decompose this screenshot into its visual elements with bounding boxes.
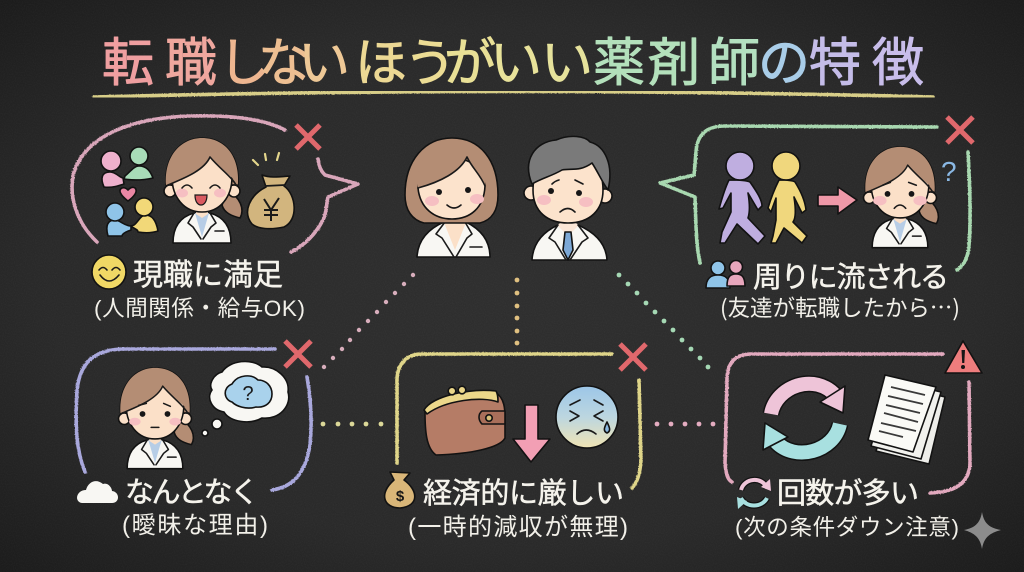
dotted connector: top left	[322, 273, 415, 369]
dotted connector: top right	[617, 273, 710, 369]
title: 徴	[872, 35, 924, 93]
icon: happy colleagues	[101, 147, 158, 236]
icon: cycle arrows	[763, 384, 845, 452]
panel: too many job changes	[725, 341, 982, 540]
icon: thought cloud	[202, 361, 289, 436]
female pharmacist	[405, 138, 498, 257]
title: い	[541, 35, 593, 93]
heading: 周りに流される	[753, 261, 949, 294]
bubble outline	[76, 349, 311, 490]
title: な	[258, 35, 310, 93]
pharmacist uneasy	[119, 368, 193, 469]
male pharmacist	[524, 136, 612, 260]
cross mark	[285, 341, 311, 367]
panel: vague reason	[76, 341, 311, 539]
title: 転	[102, 35, 154, 93]
subheading: (人間関係・給与OK)	[94, 296, 305, 321]
panel: satisfied with current job	[72, 116, 358, 321]
icon: walking friends	[719, 152, 807, 244]
icon: wallet	[424, 386, 505, 455]
dotted connector: center	[515, 278, 519, 345]
subheading: (曖昧な理由)	[122, 512, 268, 539]
central pharmacists	[405, 136, 612, 260]
question mark: ?	[941, 156, 957, 187]
title: 薬	[593, 35, 645, 93]
subheading: (次の条件ダウン注意)	[735, 515, 959, 540]
title: い	[490, 35, 542, 93]
heading: $	[396, 488, 405, 505]
panel: swept along by others	[660, 117, 973, 323]
subheading: (一時的減収が無理)	[408, 514, 628, 541]
heading: 経済的に厳しい	[423, 477, 624, 510]
pharmacist confused	[864, 147, 938, 248]
bubble outline	[397, 354, 641, 488]
title: 特	[809, 35, 861, 93]
title: ほ	[355, 35, 407, 93]
cross mark	[296, 125, 320, 149]
bubble outline	[725, 354, 970, 493]
heading: 回数が多い	[777, 477, 919, 510]
title: い	[298, 35, 350, 93]
pharmacist happy	[164, 138, 242, 243]
arrow	[818, 187, 857, 214]
title: う	[404, 35, 456, 93]
title: が	[444, 35, 496, 93]
icon: sad face	[556, 386, 618, 448]
speech bubble outline	[72, 116, 358, 252]
title: 剤	[648, 35, 700, 93]
title: 師	[708, 35, 760, 93]
title: し	[218, 35, 270, 93]
icon: warning triangle	[945, 341, 982, 373]
title underline	[94, 92, 933, 97]
heading: 現職に満足	[133, 259, 283, 292]
title: の	[758, 35, 810, 93]
cross mark	[620, 344, 646, 370]
heading: なんとなく	[125, 477, 259, 509]
dotted connector: lower left	[321, 422, 383, 426]
icon: stacked documents	[868, 375, 945, 464]
icon: sparkle	[964, 512, 1001, 549]
title: 職	[165, 35, 217, 93]
icon: thought cloud: ?	[242, 383, 254, 405]
icon: money bag yen	[248, 153, 294, 229]
speech bubble outline	[660, 126, 970, 270]
panel: financially tight	[385, 344, 646, 541]
cross mark	[947, 117, 973, 143]
subheading: (友達が転職したから…)	[720, 291, 960, 323]
dotted connector: lower right	[655, 422, 715, 426]
arrow down	[513, 405, 550, 462]
